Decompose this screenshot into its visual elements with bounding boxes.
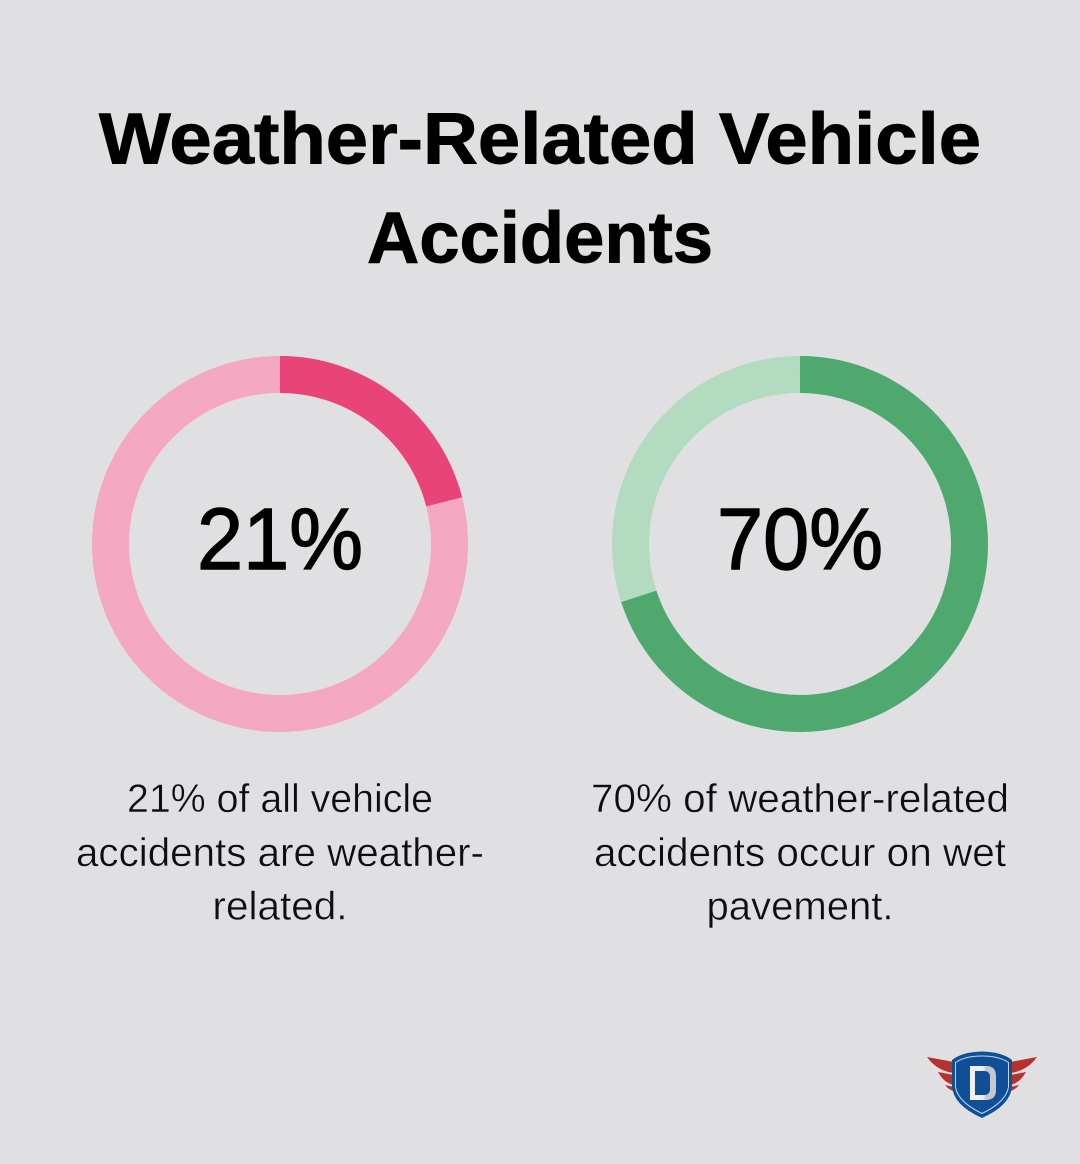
value: 21%: 21% [197,491,363,588]
shield [952,1052,1012,1118]
title: Weather-Related Vehicle [99,100,981,180]
description: 70%: 70% of weather-related [591,777,1009,821]
letter D [970,1066,996,1100]
description: 70%: accidents occur on wet [594,831,1006,875]
icon: winged shield logo [927,1052,1037,1118]
value: 70%: 70% [717,491,883,588]
description: 21%: accidents are weather- [76,831,484,875]
title: Accidents [367,198,713,278]
description: 21%: 21% of all vehicle [127,777,433,821]
wings [927,1057,1037,1091]
panel: 70% statistic [591,374,1009,928]
description: 70%: pavement. [706,884,894,928]
donut chart: 21% [110,374,450,714]
panel: 21% statistic [76,374,484,928]
description: 70% [591,777,1009,928]
donut chart: 70% [630,374,970,714]
description: 21%: related. [212,884,348,928]
description: 21% [76,777,484,928]
title [99,100,981,278]
